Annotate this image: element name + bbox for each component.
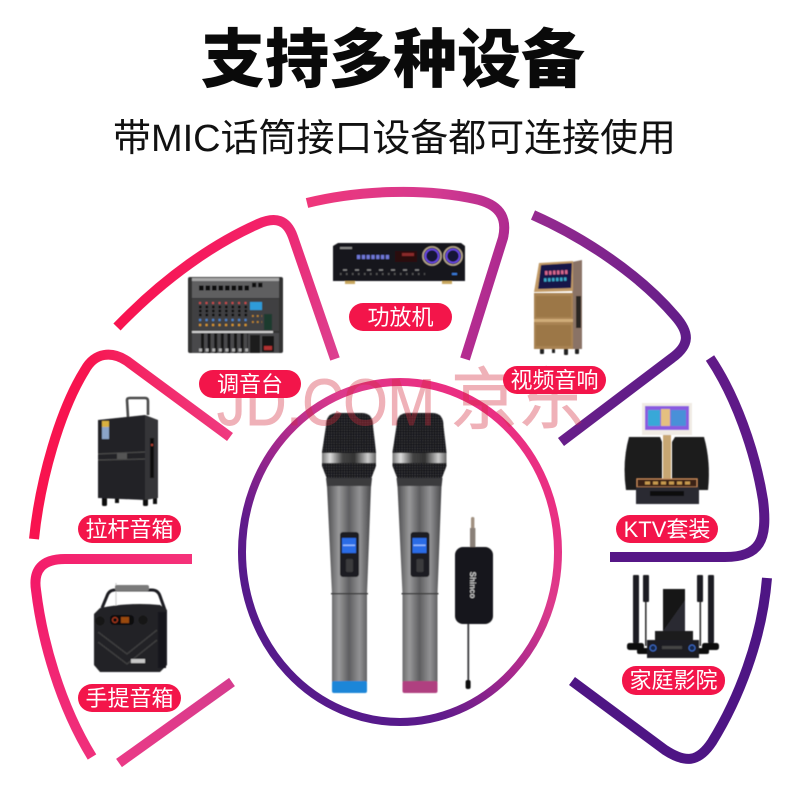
subtitle: 带MIC话筒接口设备都可连接使用 bbox=[113, 118, 676, 160]
central ring bbox=[242, 382, 558, 722]
watermark bbox=[217, 363, 585, 439]
label: amplifier bbox=[349, 303, 452, 331]
arc: amplifier segment bbox=[307, 192, 504, 359]
arc: portable speaker segment bbox=[35, 559, 192, 757]
label: amplifier: 功放机 bbox=[367, 305, 434, 330]
icon: microphone right bbox=[392, 413, 446, 693]
icon: mixer bbox=[188, 277, 283, 353]
icon: trolley speaker bbox=[98, 398, 158, 506]
icon: wireless receiver bbox=[455, 517, 493, 689]
icon: KTV set bbox=[625, 403, 709, 504]
arc: video speaker segment bbox=[533, 215, 686, 442]
icon: video karaoke speaker bbox=[534, 260, 582, 355]
title: 支持多种设备 bbox=[201, 24, 585, 96]
arc: mixer segment bbox=[117, 220, 335, 359]
label: home theater: 家庭影院 bbox=[629, 668, 718, 693]
watermark: JD.COM bbox=[217, 365, 435, 439]
icon: home theater bbox=[627, 575, 719, 658]
icon: microphone left bbox=[322, 413, 376, 693]
label: portable speaker: 手提音箱 bbox=[85, 686, 174, 711]
arc: trolley speaker segment bbox=[34, 355, 230, 539]
icon: amplifier bbox=[333, 243, 465, 284]
arc: lower left segment bbox=[119, 682, 232, 763]
label: mixer: 调音台 bbox=[217, 372, 283, 397]
label: KTV set: KTV套装 bbox=[624, 517, 710, 542]
label: trolley speaker: 拉杆音箱 bbox=[85, 517, 174, 542]
watermark: 京东 bbox=[451, 363, 585, 438]
arc: KTV segment bbox=[610, 358, 764, 557]
label: mixer bbox=[199, 370, 301, 398]
label: video speaker: 视频音响 bbox=[510, 368, 599, 393]
icon: portable speaker bbox=[94, 583, 167, 672]
icon: wireless receiver: Shinco bbox=[468, 572, 477, 598]
arc: home theater segment bbox=[572, 578, 767, 759]
